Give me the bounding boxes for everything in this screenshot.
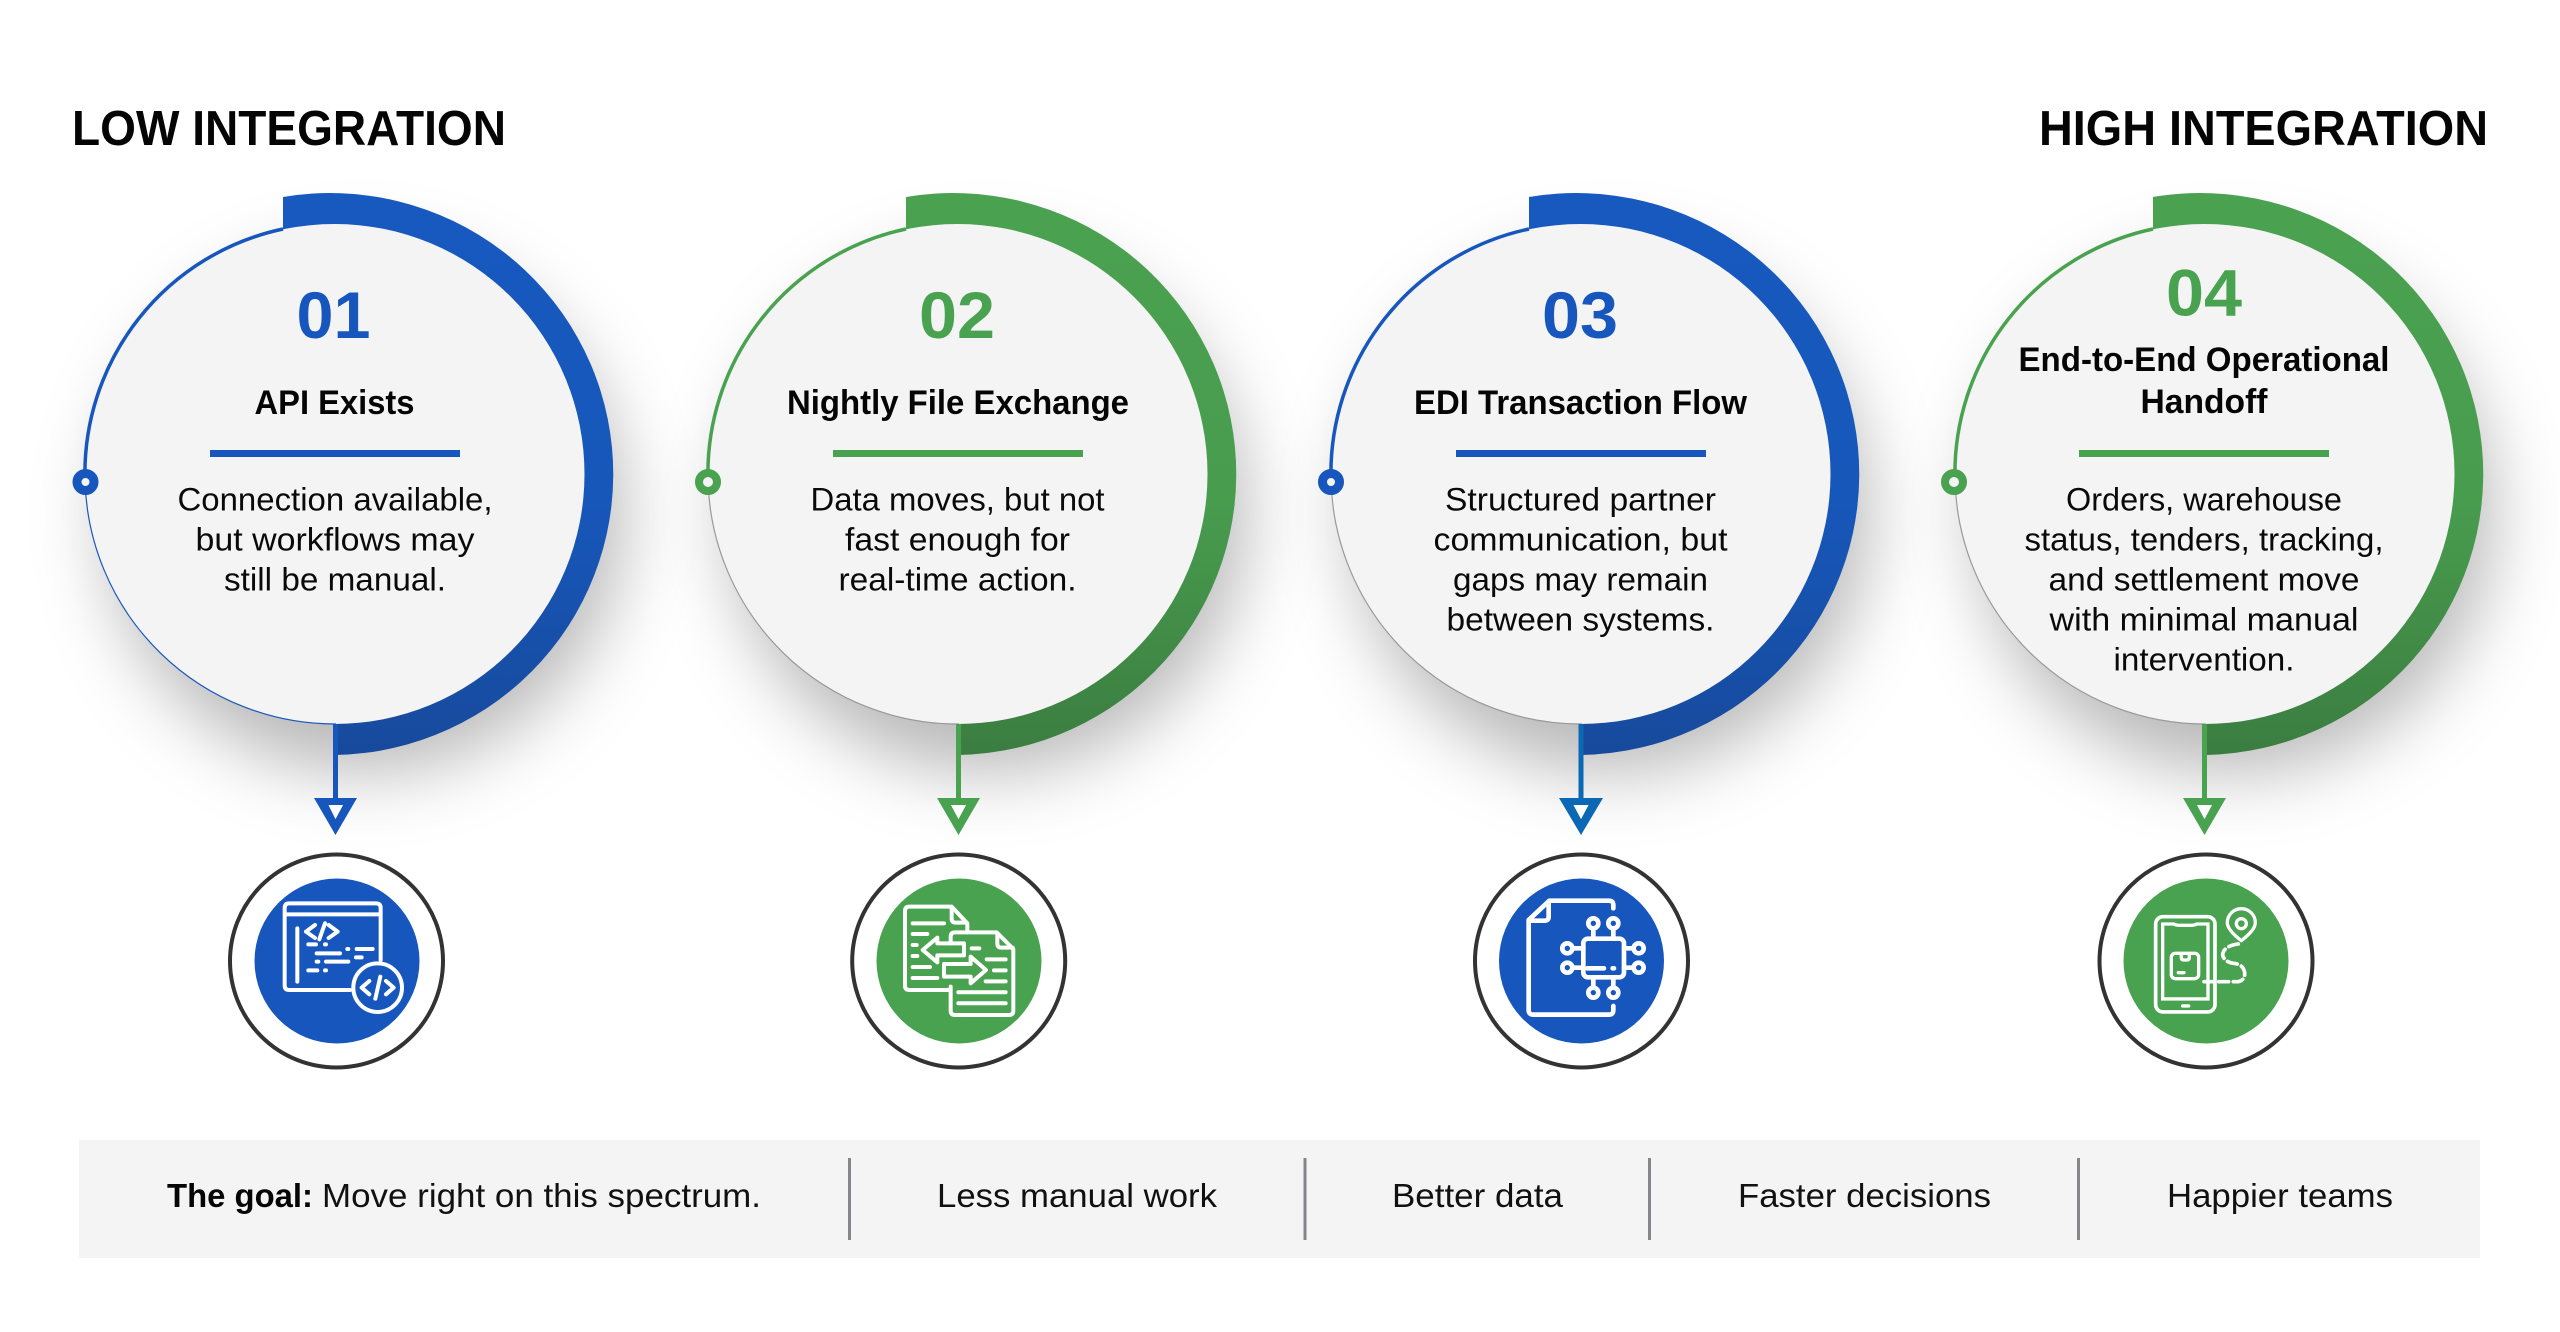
icon: document with chip [1475,854,1688,1068]
number: 04 [2166,256,2242,330]
circle face [84,224,584,724]
description: with minimal manual [2048,602,2358,638]
description: Orders, warehouse [2066,482,2342,518]
arrow [314,724,357,835]
divider [833,450,1083,457]
description [1434,482,1728,638]
divider [210,450,460,457]
accent arc [1529,193,1859,755]
description: still be manual. [224,562,446,598]
description: Connection available, [178,482,492,518]
number: 01 [296,278,370,352]
title: EDI Transaction Flow [1414,384,1748,422]
circle shadow [1352,256,1868,772]
heading: high integration: HIGH INTEGRATION [2039,101,2488,156]
arrow [2183,724,2226,835]
benefit: faster decisions: Faster decisions [1738,1177,1991,1214]
circle face [1330,224,1830,724]
title: Nightly File Exchange [787,384,1129,422]
number: 03 [1542,278,1618,352]
panel: step 01 [77,193,622,1067]
circle face [708,224,1208,724]
icon: phone with route [2100,854,2312,1068]
divider [1456,450,1706,457]
description: communication, but [1434,522,1728,558]
description: between systems. [1446,602,1714,638]
circle shadow [1976,256,2492,772]
accent arc [906,193,1236,755]
benefit: happier teams: Happier teams [2167,1177,2393,1214]
node [1322,474,1340,490]
title: Handoff [2140,383,2268,421]
description: Data moves, but not [810,482,1104,518]
panel: goal bar [79,1140,2480,1258]
circle face [1954,224,2454,724]
title: End-to-End Operational [2018,341,2390,379]
node [1945,473,1963,491]
node [77,474,94,490]
description: intervention. [2114,642,2294,678]
description [178,482,492,598]
icon: code window [230,854,443,1068]
description [810,482,1104,598]
divider [2079,450,2329,457]
circle shadow [106,256,622,772]
description: status, tenders, tracking, [2024,522,2384,558]
description: Structured partner [1445,482,1716,518]
description: fast enough for [845,522,1070,558]
circle outline [1331,229,1582,724]
accent arc [2153,193,2483,755]
arrow [937,724,980,835]
accent arc [283,193,613,755]
circle outline [708,229,959,724]
number: 02 [919,278,995,352]
description: gaps may remain [1453,562,1708,598]
title: API Exists [254,384,414,422]
benefit: better data: Better data [1392,1177,1564,1214]
arrow [1559,724,1603,835]
node [699,473,717,491]
heading: low integration: LOW INTEGRATION [72,101,506,156]
goal statement: The goal: [167,1177,313,1214]
description: but workflows may [196,522,475,558]
circle shadow [729,256,1245,772]
panel: step 04 [1945,193,2492,1067]
description: and settlement move [2048,562,2360,598]
description: real-time action. [838,562,1076,598]
description [2024,482,2384,678]
circle outline [85,229,336,724]
benefit: less manual work: Less manual work [937,1177,1218,1214]
panel: step 02 [699,193,1245,1067]
title [2018,341,2390,421]
circle outline [1955,229,2206,724]
icon: file exchange [852,854,1065,1068]
panel: step 03 [1322,193,1868,1067]
goal statement continuation: Move right on this spectrum. [322,1177,761,1214]
